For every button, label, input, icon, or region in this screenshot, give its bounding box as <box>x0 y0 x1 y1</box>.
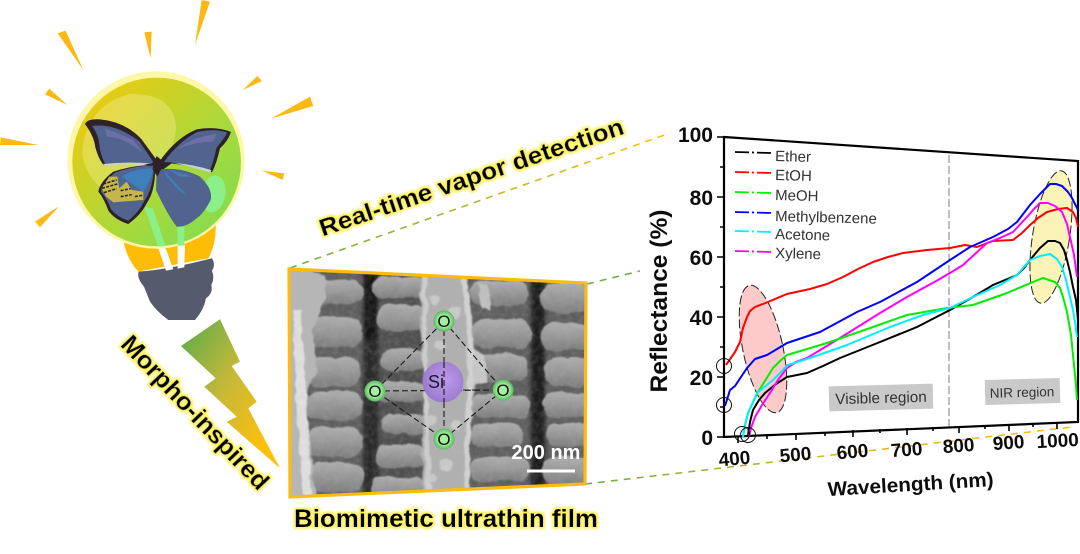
connector: upper dashed line <box>290 133 670 268</box>
x axis labels: 800 <box>942 435 975 458</box>
legend: Ether <box>775 148 811 166</box>
start point circles <box>716 358 756 442</box>
x axis title: Wavelength (nm) <box>827 469 994 501</box>
molecule: SiO4 tetrahedral structure: O <box>437 312 451 331</box>
curve: Methylbenzene <box>725 184 1078 406</box>
legend: Methylbenzene <box>775 208 877 228</box>
region ellipses <box>730 281 796 417</box>
x axis labels: 700 <box>890 439 923 462</box>
x axis labels: 900 <box>992 432 1025 455</box>
glass highlight <box>82 94 176 193</box>
molecule: SiO4 tetrahedral structure: Si <box>428 372 444 392</box>
legend: Xylene <box>775 245 821 263</box>
curve: Xylene <box>749 203 1077 437</box>
label: NIR region <box>985 378 1060 405</box>
scale bar: 200 nm: 200 nm <box>512 442 580 464</box>
label: NIR region: NIR region <box>990 384 1054 401</box>
y axis title: Reflectance (%) <box>646 210 673 392</box>
icon: lightning bolt <box>181 319 280 468</box>
molecule: SiO4 tetrahedral structure: O <box>437 430 451 449</box>
panel: SEM micrograph of film <box>285 265 592 505</box>
butterfly <box>85 119 231 227</box>
bulb screw base <box>138 258 214 320</box>
SEM image <box>290 270 585 496</box>
label: Visible region <box>829 384 933 411</box>
y axis labels <box>678 124 713 450</box>
y axis labels: 60 <box>690 247 713 270</box>
legend: Acetone <box>775 226 830 244</box>
legend <box>735 148 877 263</box>
label: Visible region: Visible region <box>835 389 927 408</box>
x axis labels: 500 <box>779 444 812 467</box>
y axis labels: 40 <box>690 307 713 330</box>
curve: Ether <box>748 241 1078 435</box>
curve: Acetone <box>743 254 1077 437</box>
legend: EtOH <box>775 167 812 185</box>
x axis labels: 600 <box>836 441 869 464</box>
connector: lower dashed line <box>585 427 1072 484</box>
nanostructure scales patch <box>102 177 143 202</box>
legend: MeOH <box>775 187 819 205</box>
filament stripes <box>158 245 185 271</box>
curve: EtOH <box>726 208 1078 365</box>
icon: light bulb with butterfly <box>67 71 245 320</box>
y axis labels: 0 <box>701 427 713 450</box>
x axis labels: 400 <box>718 448 751 471</box>
label: Morpho-inspired: Morpho-inspired <box>115 330 274 496</box>
y axis labels: 100 <box>678 124 713 147</box>
y axis labels: 20 <box>690 367 713 390</box>
heading: Real-time vapor detection: Real-time vapor detection <box>316 114 627 242</box>
x axis labels <box>718 430 1079 471</box>
bulb glass <box>72 78 241 246</box>
film border <box>289 269 586 497</box>
axis ticks <box>717 137 1057 443</box>
chart: reflectance vs wavelength <box>646 124 1080 501</box>
curve: MeOH <box>743 278 1077 437</box>
y axis labels: 80 <box>690 187 713 210</box>
molecule: SiO4 tetrahedral structure: O <box>496 381 510 400</box>
icon: light rays <box>0 0 313 227</box>
bulb neck <box>123 223 216 272</box>
bulb glass halo <box>67 71 245 249</box>
molecule: SiO4 tetrahedral structure <box>364 310 514 450</box>
butterfly body <box>153 156 163 177</box>
molecule: SiO4 tetrahedral structure: O <box>368 382 382 401</box>
plot frame <box>724 137 1078 437</box>
x axis labels: 1000 <box>1036 430 1079 453</box>
heading: Biomimetic ultrathin film: Biomimetic ultrathin film <box>294 505 598 533</box>
region divider <box>948 155 950 427</box>
connector: middle dashed line <box>587 271 640 284</box>
